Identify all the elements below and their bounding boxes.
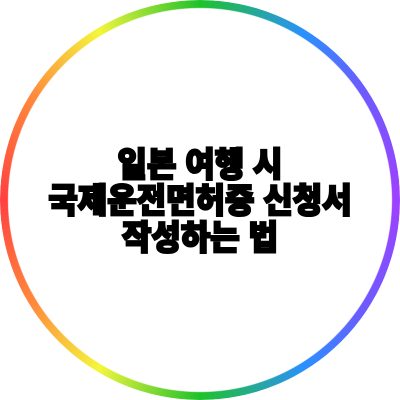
title: 작성하는 법 (122, 219, 278, 257)
title: 국제운전면허증 신청서 (48, 182, 352, 220)
title (48, 146, 352, 257)
title: 일본 여행 시 (118, 146, 282, 184)
